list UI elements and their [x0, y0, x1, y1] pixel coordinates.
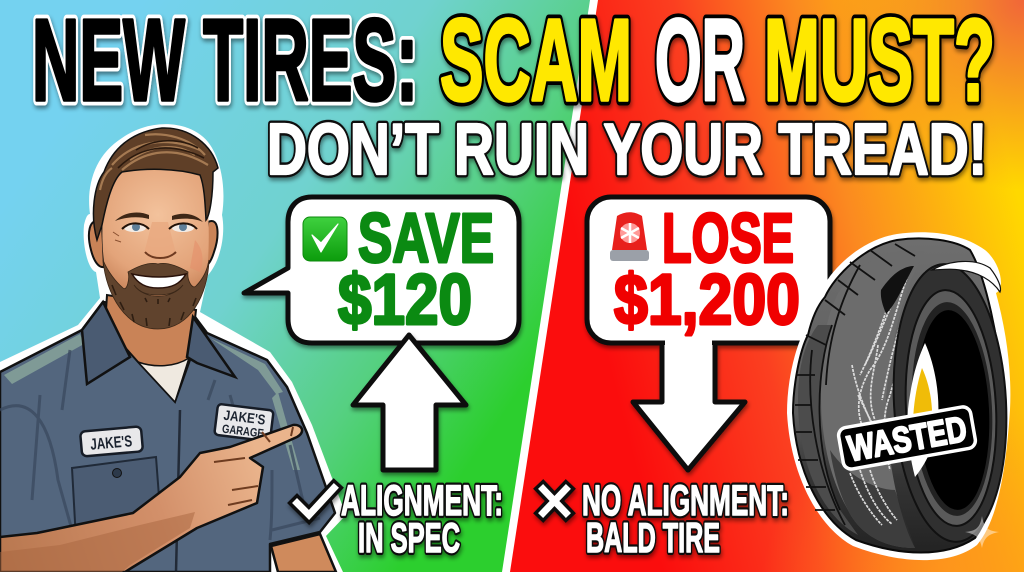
finger details [214, 427, 293, 505]
collar [82, 302, 130, 384]
hair dark strands [118, 141, 204, 168]
tread shoulder [798, 325, 858, 535]
label line 2 [586, 514, 720, 561]
diagonal divider [502, 0, 598, 572]
eyes [113, 223, 197, 242]
label line 1 [341, 477, 503, 525]
name tag: jake's: JAKE'S [90, 433, 133, 454]
name tag: jake's garage: JAKE'S [223, 407, 266, 428]
lower tread shadow [830, 450, 915, 548]
label line 1: ALIGNMENT: [341, 477, 503, 525]
label: alignment in spec [297, 477, 503, 561]
beard [103, 260, 209, 329]
tread grooves [795, 244, 915, 525]
mechanic illustration [0, 124, 346, 572]
title: new tires [32, 0, 418, 125]
nose underside [145, 252, 176, 258]
worn tread [821, 251, 925, 548]
sidewall [887, 261, 1013, 545]
see-through gap background [913, 368, 932, 440]
tire illustration [787, 232, 1013, 560]
label line 2: IN SPEC [358, 514, 460, 561]
ears [89, 221, 218, 267]
title: or [655, 0, 745, 125]
background: red side [500, 0, 1024, 572]
amount: $120: $120 [338, 261, 472, 340]
name tag: jake's [80, 426, 143, 457]
arrow: up [353, 335, 466, 470]
bubble shape [244, 197, 519, 343]
icon: x mark [543, 489, 566, 513]
tear [881, 266, 914, 314]
title [32, 0, 995, 125]
label line 1: ALIGNMENT: [341, 477, 503, 525]
forearm and pointing hand [0, 425, 302, 572]
sidewall ring [900, 288, 1002, 528]
label line 1: NO ALIGNMENT: [582, 477, 789, 525]
speech bubble: lose [587, 197, 830, 343]
wasted badge: WASTED [844, 408, 970, 469]
name tag: jake's garage: GARAGE [221, 422, 265, 441]
save text: SAVE [358, 199, 494, 277]
arm shading [0, 512, 195, 572]
pocket button [112, 468, 122, 478]
label line 2 [358, 514, 460, 561]
peeling tread strip [932, 261, 1001, 292]
hair strands [100, 134, 208, 190]
collar right [187, 317, 235, 377]
icon: siren [610, 212, 649, 261]
label: no alignment bald tire [543, 477, 789, 561]
rim ring [906, 300, 998, 518]
right arm lower [271, 534, 336, 572]
label line 1 [582, 477, 789, 525]
background: green side [0, 0, 600, 572]
frayed cords [850, 272, 925, 525]
speech bubble: save [244, 197, 519, 343]
see-through gap white [908, 343, 938, 477]
undershirt [138, 358, 189, 402]
sparkle watermark [965, 516, 999, 548]
hair [93, 128, 218, 240]
check mark fill [297, 488, 334, 515]
icon: check mark [297, 488, 334, 515]
label line 2: BALD TIRE [586, 514, 720, 561]
name tag: jake's garage [214, 404, 274, 441]
neck [105, 295, 196, 402]
label line 2: BALD TIRE [586, 514, 720, 561]
label line 2: IN SPEC [358, 514, 460, 561]
label line 1: NO ALIGNMENT: [582, 477, 789, 525]
bubble shape [587, 197, 830, 343]
amount: $1,200: $1,200 [614, 261, 800, 340]
title: scam [440, 0, 632, 125]
eyebrows [115, 213, 203, 222]
shirt folds [0, 350, 320, 572]
tire hole [912, 308, 994, 512]
icon: green check [303, 217, 347, 261]
shirt pocket [72, 457, 160, 540]
x mark fill [543, 489, 566, 513]
lose text: LOSE [662, 199, 794, 277]
mechanic white outline [0, 124, 346, 572]
arrow: down [633, 338, 745, 470]
face [102, 170, 209, 329]
shirt [0, 302, 335, 572]
tire body [793, 238, 1003, 552]
cheek shading [190, 240, 203, 272]
nose [145, 222, 175, 258]
smile [132, 274, 186, 288]
shirt shoulder highlight [4, 334, 300, 470]
tire white outline [787, 232, 1010, 560]
beard texture [112, 285, 196, 326]
